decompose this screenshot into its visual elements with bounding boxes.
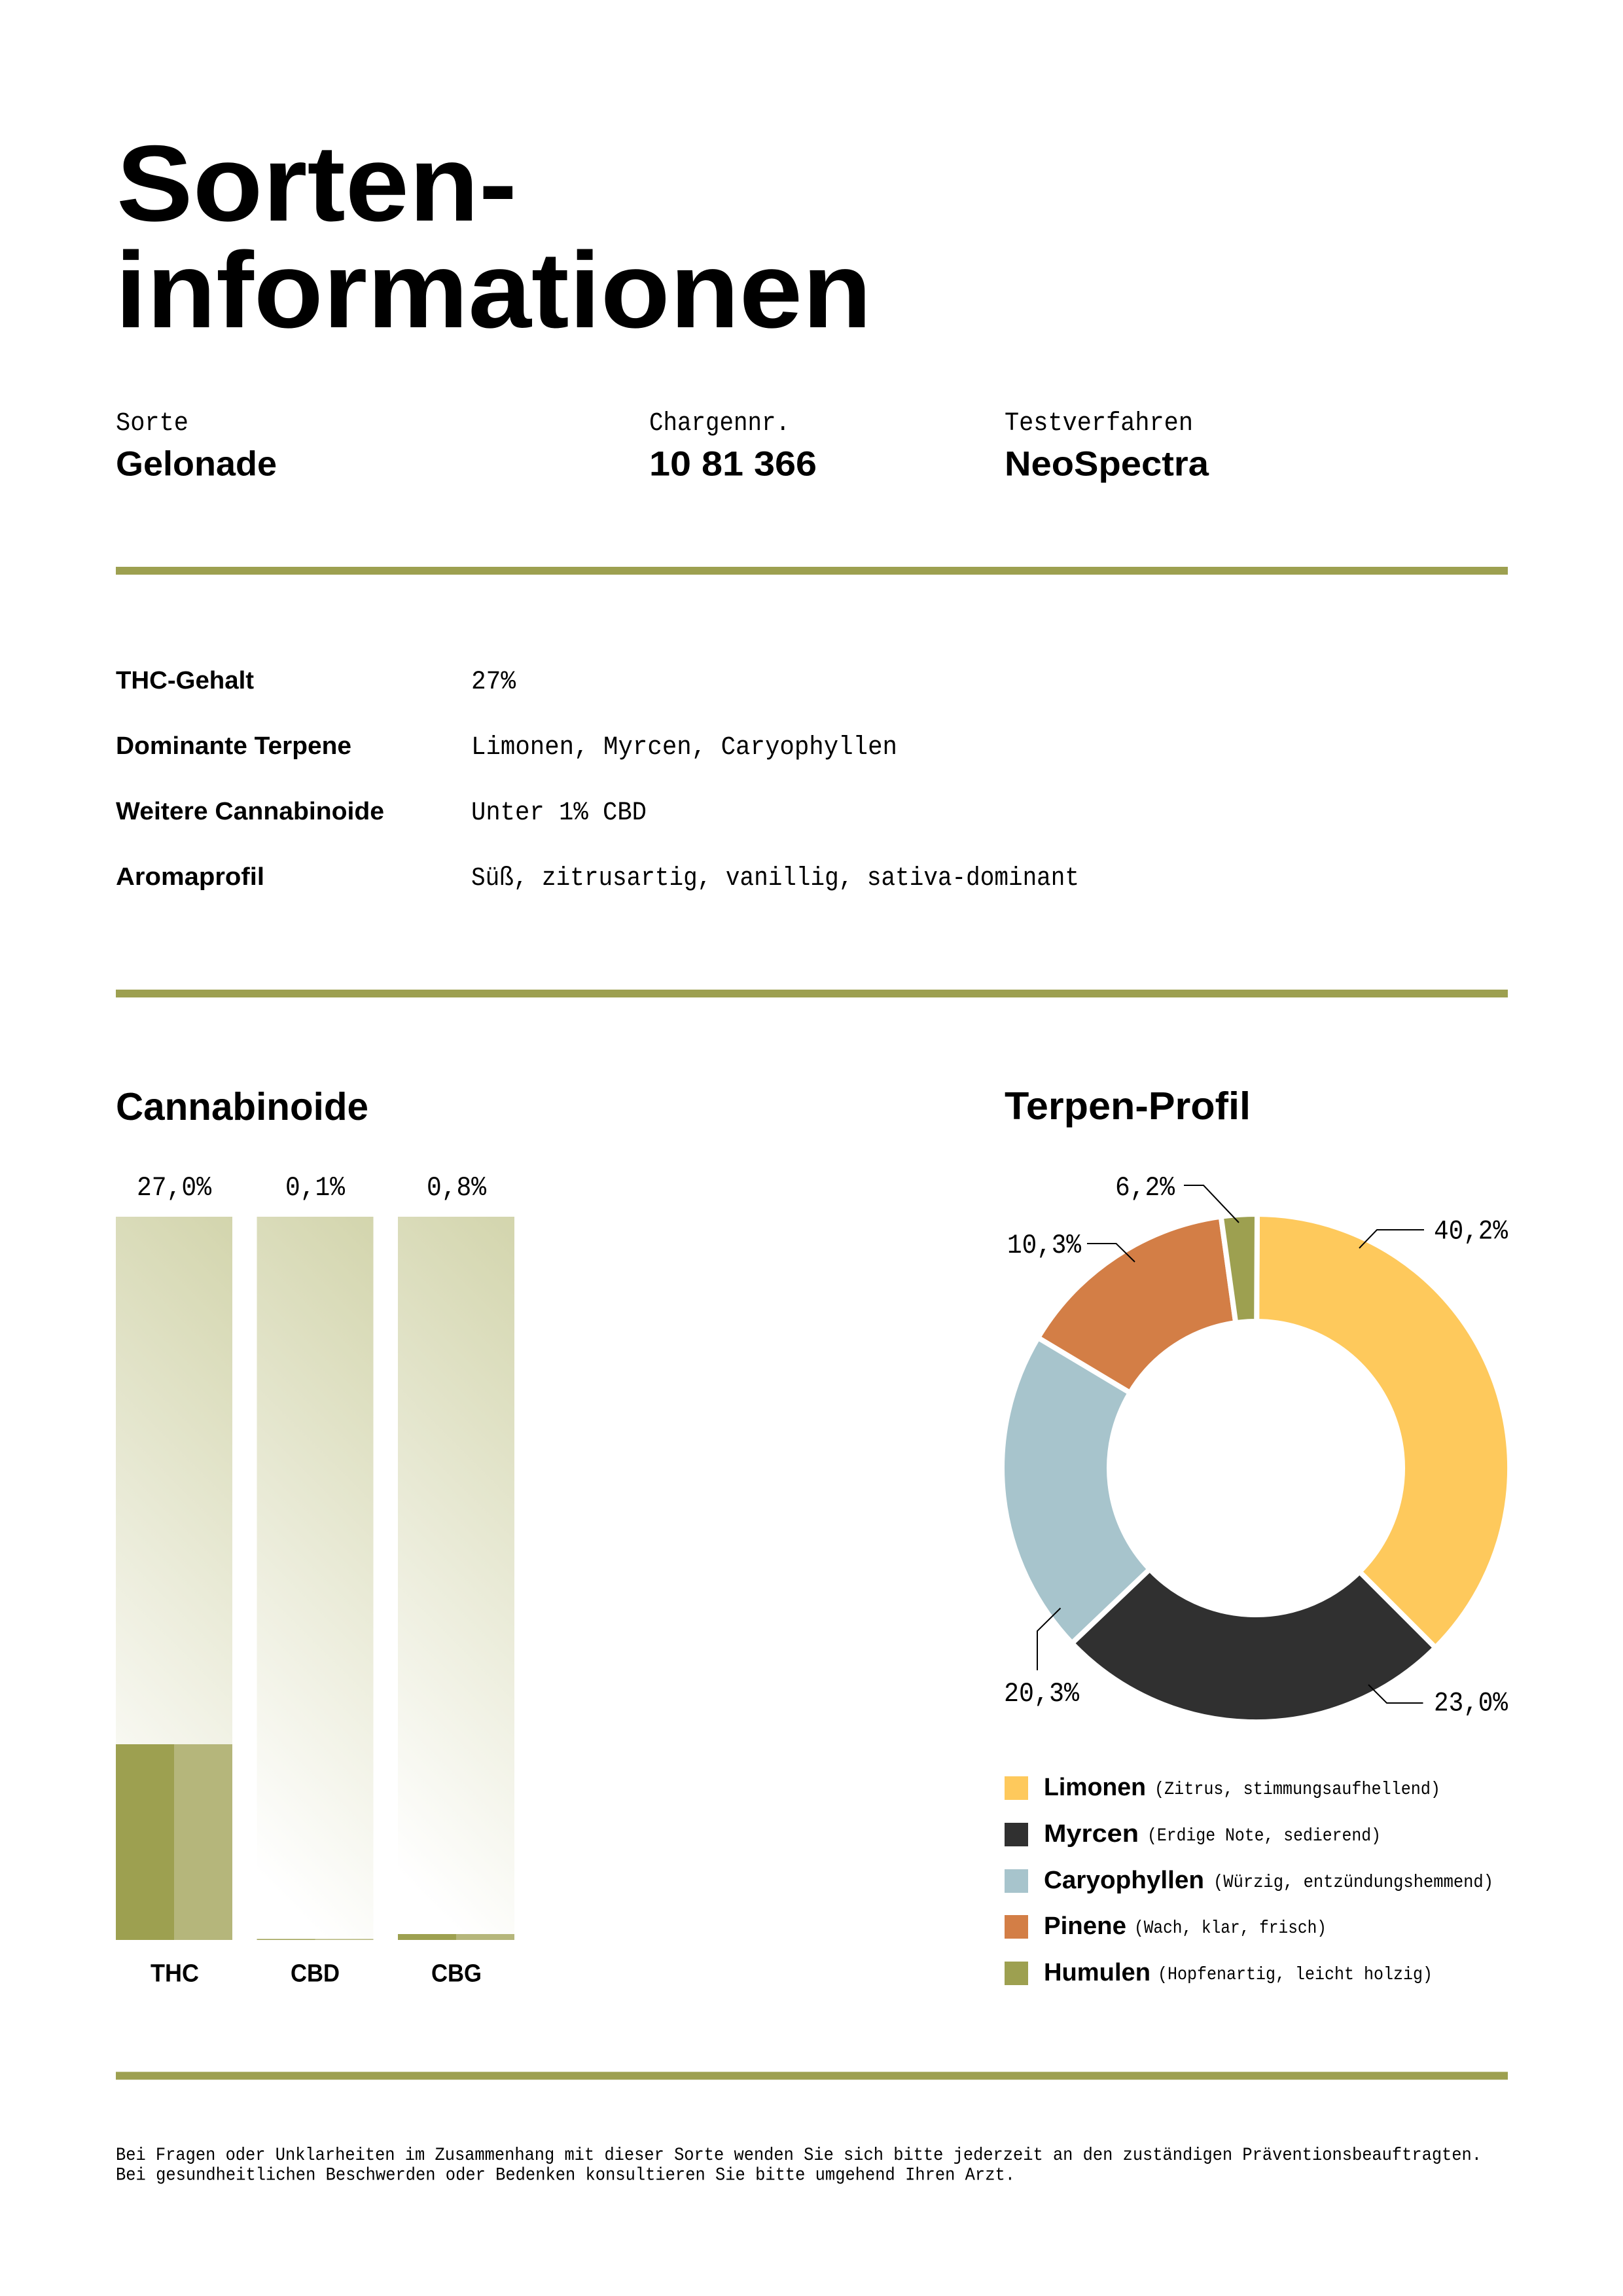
callout: 6,2%: 6,2% [1115,1172,1175,1204]
legend item: Limonen: Limonen [1044,1774,1146,1801]
meta: Sorte: Sorte [116,409,188,439]
callout: 40,2% [1359,1216,1508,1248]
legend item: Pinene: (Wach, klar, frisch) [1134,1918,1327,1939]
bar: THC: 27,0% [137,1172,212,1204]
wedge: Humulen [1221,1214,1257,1323]
wedge: Limonen [1257,1214,1510,1647]
callout: 10,3%: 10,3% [1007,1230,1082,1261]
info table [116,667,1079,893]
legend item: Caryophyllen [1005,1867,1493,1894]
title: informationen [115,230,872,350]
callout: 23,0% [1368,1685,1508,1719]
legend item: Myrcen [1005,1820,1381,1848]
callout: 23,0%: 23,0% [1434,1687,1508,1719]
row: THC-Gehalt: THC-Gehalt [116,667,254,694]
bar: CBD [257,1172,373,1987]
row: Aromaprofil [116,863,1079,893]
bar chart: Cannabinoide [116,1172,514,1987]
bar: CBD: 0,1% [285,1172,346,1204]
legend item: Caryophyllen: Caryophyllen [1044,1867,1204,1894]
legend item: Limonen: (Zitrus, stimmungsaufhellend) [1154,1780,1440,1800]
meta: Testverfahren [1005,409,1209,483]
wedge: Myrcen [1072,1570,1435,1722]
bar: THC [116,1172,232,1987]
wedge: Caryophyllen [1002,1338,1150,1643]
row: Weitere Cannabinoide: Weitere Cannabinoide [116,798,384,825]
legend item: Humulen [1005,1959,1433,1986]
heading: Cannabinoide: Cannabinoide [116,1085,368,1128]
row: Weitere Cannabinoide: Unter 1% CBD [471,798,647,828]
callout: 20,3%: 20,3% [1004,1678,1080,1710]
callout: 6,2% [1115,1172,1239,1223]
legend item: Limonen [1005,1774,1440,1801]
row: THC-Gehalt [116,667,516,697]
meta: Chargennr.: 10 81 366 [649,445,817,483]
callout: 20,3% [1004,1608,1080,1710]
wedge: Pinene [1038,1217,1236,1393]
meta: Testverfahren: Testverfahren [1005,409,1193,439]
legend item: Humulen: Humulen [1044,1959,1150,1986]
title [115,123,872,350]
legend item: Caryophyllen: (Würzig, entzündungshemmend) [1213,1873,1493,1893]
meta: Sorte: Gelonade [116,445,277,483]
row: Aromaprofil: Aromaprofil [116,863,264,891]
donut chart: Terpen-Profil [1002,1214,1510,1722]
legend item: Myrcen: (Erdige Note, sedierend) [1147,1826,1381,1846]
title: Sorten- [116,123,517,243]
legend item: Humulen: (Hopfenartig, leicht holzig) [1158,1965,1433,1985]
row: Dominante Terpene: Limonen, Myrcen, Caryophyllen [471,733,897,762]
legend [1005,1774,1493,1986]
meta: Testverfahren: NeoSpectra [1005,445,1209,483]
meta: Chargennr.: Chargennr. [649,409,790,439]
bar: CBG: 0,8% [427,1172,487,1204]
footer note [116,2145,1482,2186]
meta: Chargennr. [649,409,817,483]
heading: Terpen-Profil: Terpen-Profil [1005,1085,1251,1128]
legend item: Myrcen: Myrcen [1044,1820,1139,1848]
bar: THC: THC [151,1960,199,1987]
meta: Sorte [116,409,277,483]
row: Weitere Cannabinoide [116,798,647,828]
bar: CBG: CBG [431,1960,482,1987]
bar: CBG [398,1172,514,1987]
callout: 10,3% [1007,1230,1135,1262]
legend item: Pinene: Pinene [1044,1912,1126,1940]
legend item: Pinene [1005,1912,1327,1940]
footer note: Bei gesundheitlichen Beschwerden oder Bedenken konsultieren Sie bitte umgehend Ihren Arzt. [116,2165,1015,2186]
row: Dominante Terpene: Dominante Terpene [116,732,351,760]
row: Aromaprofil: Süß, zitrusartig, vanillig, sativa-dominant [471,864,1079,893]
callout: 40,2%: 40,2% [1434,1216,1508,1247]
bar: CBD: CBD [291,1960,340,1987]
row: THC-Gehalt: 27% [471,668,516,697]
row: Dominante Terpene [116,732,897,762]
footer note: Bei Fragen oder Unklarheiten im Zusammenhang mit dieser Sorte wenden Sie sich bitte jederzeit an den zuständigen Präventionsbeauftragten. [116,2145,1482,2166]
